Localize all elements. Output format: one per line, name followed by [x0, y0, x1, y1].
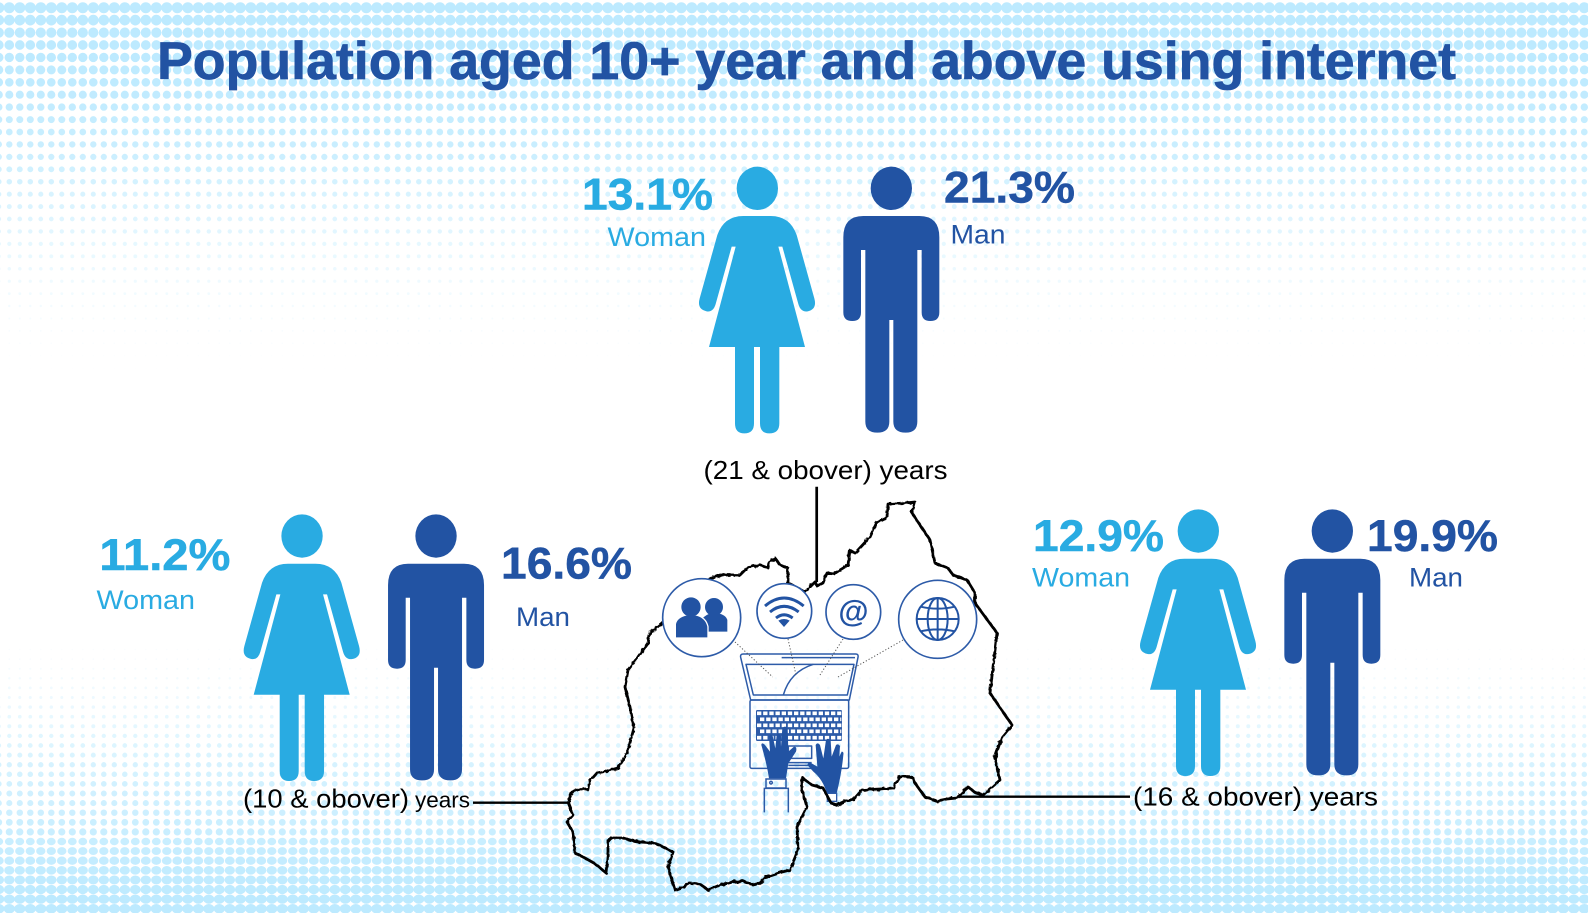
connector line to 21 and over	[815, 487, 818, 582]
laptop with typing hands	[741, 654, 858, 812]
icon: right hand and cuff	[807, 739, 843, 801]
woman label, 21 and over: Woman	[608, 222, 706, 252]
man percentage, 21 and over: 21.3%	[944, 164, 1075, 213]
laptop screen	[741, 654, 858, 700]
icon: at sign	[826, 585, 881, 639]
woman label, 16 and over: Woman	[1032, 563, 1130, 593]
icon: woman figure, 21 and over	[699, 167, 815, 433]
man label, 21 and over: Man	[950, 219, 1006, 249]
man percentage, 10 and over: 16.6%	[501, 539, 632, 588]
icon: man figure, 10 and over	[388, 514, 484, 780]
age caption, 21 and over: (21 & obover) years	[704, 455, 948, 485]
laptop base	[750, 700, 849, 768]
icon: left hand and sleeve	[761, 727, 796, 812]
age caption, 16 and over: (16 & obover) years	[1133, 782, 1378, 812]
woman percentage, 16 and over: 12.9%	[1033, 512, 1164, 561]
man label, 10 and over: Man	[516, 602, 570, 632]
icon: globe	[899, 580, 977, 658]
connector line to 16 and over	[957, 796, 1130, 798]
icon circles	[663, 579, 977, 658]
panel: 21 and over years	[582, 164, 1075, 485]
woman percentage, 21 and over: 13.1%	[582, 170, 713, 219]
icon: man figure, 21 and over	[843, 167, 939, 433]
man label, 16 and over: Man	[1409, 563, 1463, 593]
keyboard	[756, 710, 842, 741]
dotted links from icons to laptop	[735, 639, 903, 677]
map outline of Rwanda	[567, 502, 1012, 890]
connector line to 10 and over	[473, 802, 569, 804]
woman label, 10 and over: Woman	[96, 585, 195, 615]
icon: man figure, 16 and over	[1284, 509, 1380, 775]
age caption, 10 and over: years	[415, 787, 470, 812]
panel: 10 and over years	[96, 514, 632, 813]
man percentage, 16 and over: 19.9%	[1367, 512, 1498, 561]
icon: people	[663, 579, 741, 657]
icon: woman figure, 16 and over	[1140, 509, 1256, 776]
title: Population aged 10+ year and above using internet	[157, 32, 1456, 91]
woman percentage, 10 and over: 11.2%	[99, 531, 230, 580]
icon: at sign: @	[838, 593, 869, 628]
age caption, 10 and over: (10 & obover)	[243, 783, 409, 813]
panel: 16 and over years	[1032, 509, 1498, 812]
icon: wifi	[757, 584, 812, 638]
icon: woman figure, 10 and over	[244, 514, 360, 781]
